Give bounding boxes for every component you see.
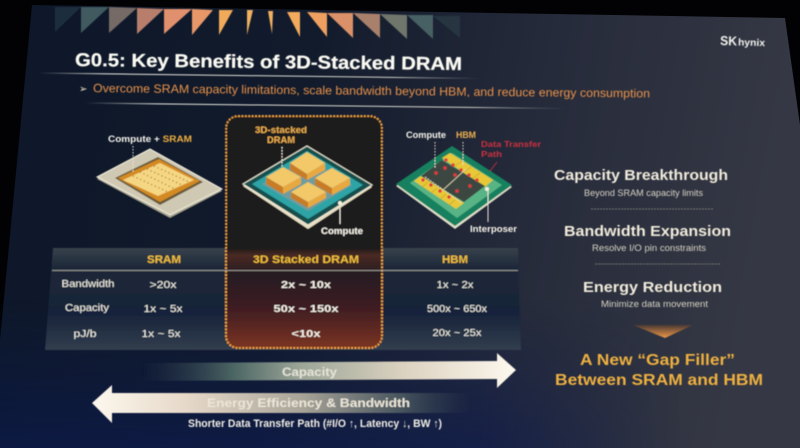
- logo: SK hynix: hynix: [738, 37, 766, 49]
- label: Data Transfer Path: Path: [481, 149, 502, 159]
- DRAM stack: bottom: [291, 182, 326, 208]
- comparison table band: [45, 248, 521, 350]
- benefit: energy reduction: [583, 280, 722, 309]
- conclusion: gap filler: [555, 352, 763, 389]
- down chevron: [633, 325, 693, 338]
- capacity arrow: Capacity: [282, 365, 337, 379]
- conclusion: gap filler: Between SRAM and HBM: [555, 372, 763, 389]
- DRAM stack: left: [266, 167, 301, 194]
- table rows: <10x: [292, 328, 321, 340]
- label: Compute + SRAM: Compute + SRAM: [108, 134, 192, 144]
- table rows: Bandwidth: [62, 278, 115, 290]
- label: Compute: Compute: [406, 130, 446, 140]
- label: HBM: HBM: [456, 130, 476, 140]
- energy efficiency and bandwidth arrow: Energy Efficiency & Bandwidth: [207, 396, 410, 410]
- table header: HBM: [442, 254, 468, 266]
- table rows: >20x: [150, 279, 177, 291]
- title rule: [38, 72, 480, 79]
- highlighted 3D stacked DRAM box: [226, 116, 382, 348]
- benefit: bandwidth expansion: Bandwidth Expansion: [564, 224, 731, 240]
- diagram: Compute + SRAM: [97, 134, 222, 218]
- benefit: bandwidth expansion: Resolve I/O pin constraints: [592, 243, 707, 253]
- capacity arrow: [140, 353, 516, 388]
- energy efficiency and bandwidth arrow: [92, 385, 473, 423]
- table rows: 2x ~ 10x: [281, 279, 331, 291]
- label: Compute: Compute: [321, 226, 363, 236]
- subtitle rule: [85, 102, 565, 109]
- label: Data Transfer Path: Data Transfer: [481, 139, 542, 149]
- title: G0.5: Key Benefits of 3D-Stacked DRAM: [75, 49, 462, 74]
- table rows: pJ/b: [74, 328, 97, 340]
- label: 3D-stacked DRAM: 3D-stacked: [255, 125, 307, 135]
- conclusion: gap filler: A New “Gap Filler”: [580, 352, 735, 369]
- compute dies: [421, 160, 485, 202]
- decorative triangle banner: [55, 7, 460, 39]
- benefit: energy reduction: Energy Reduction: [583, 280, 722, 296]
- table rows: 50x ~ 150x: [274, 303, 339, 315]
- table rows: [62, 278, 488, 340]
- upper HBM strip: [442, 153, 493, 187]
- logo: SK hynix: SK: [720, 33, 738, 48]
- logo: SK hynix: [720, 33, 766, 49]
- benefit: capacity breakthrough: Beyond SRAM capacity limits: [584, 188, 703, 198]
- shorter path caption: Shorter Data Transfer Path (#I/O ↑, Latency ↓, BW ↑): [188, 418, 442, 430]
- table rows: 1x ~ 5x: [142, 328, 181, 340]
- diagram: 3D-stacked DRAM: [243, 125, 372, 236]
- subtitle: Overcome SRAM capacity limitations, scale bandwidth beyond HBM, and reduce energy consumption: [93, 81, 650, 100]
- table header: 3D Stacked DRAM: [253, 254, 359, 266]
- benefit: capacity breakthrough: [554, 168, 728, 198]
- benefit: bandwidth expansion: [564, 224, 731, 253]
- table header: [147, 254, 468, 266]
- label: Data Transfer Path: [481, 139, 542, 159]
- lower HBM strip: [414, 176, 464, 209]
- table rows: 1x ~ 2x: [436, 279, 474, 291]
- DRAM stack: top: [290, 152, 325, 180]
- table rows: 20x ~ 25x: [432, 327, 482, 339]
- DRAM stack: right: [315, 168, 350, 195]
- table header: SRAM: [147, 254, 181, 266]
- table rows: 1x ~ 5x: [144, 303, 183, 315]
- table rows: 500x ~ 650x: [427, 303, 488, 315]
- benefit: energy reduction: Minimize data movement: [601, 299, 709, 309]
- diagram: 3D-stacked DRAM: DRAM: [267, 135, 295, 145]
- benefit: capacity breakthrough: Capacity Breakthrough: [554, 168, 728, 184]
- subtitle: ➢: [79, 84, 87, 95]
- table rows: Capacity: [65, 302, 110, 314]
- diagram: HBM: [396, 130, 542, 234]
- label: Interposer: Interposer: [470, 224, 518, 234]
